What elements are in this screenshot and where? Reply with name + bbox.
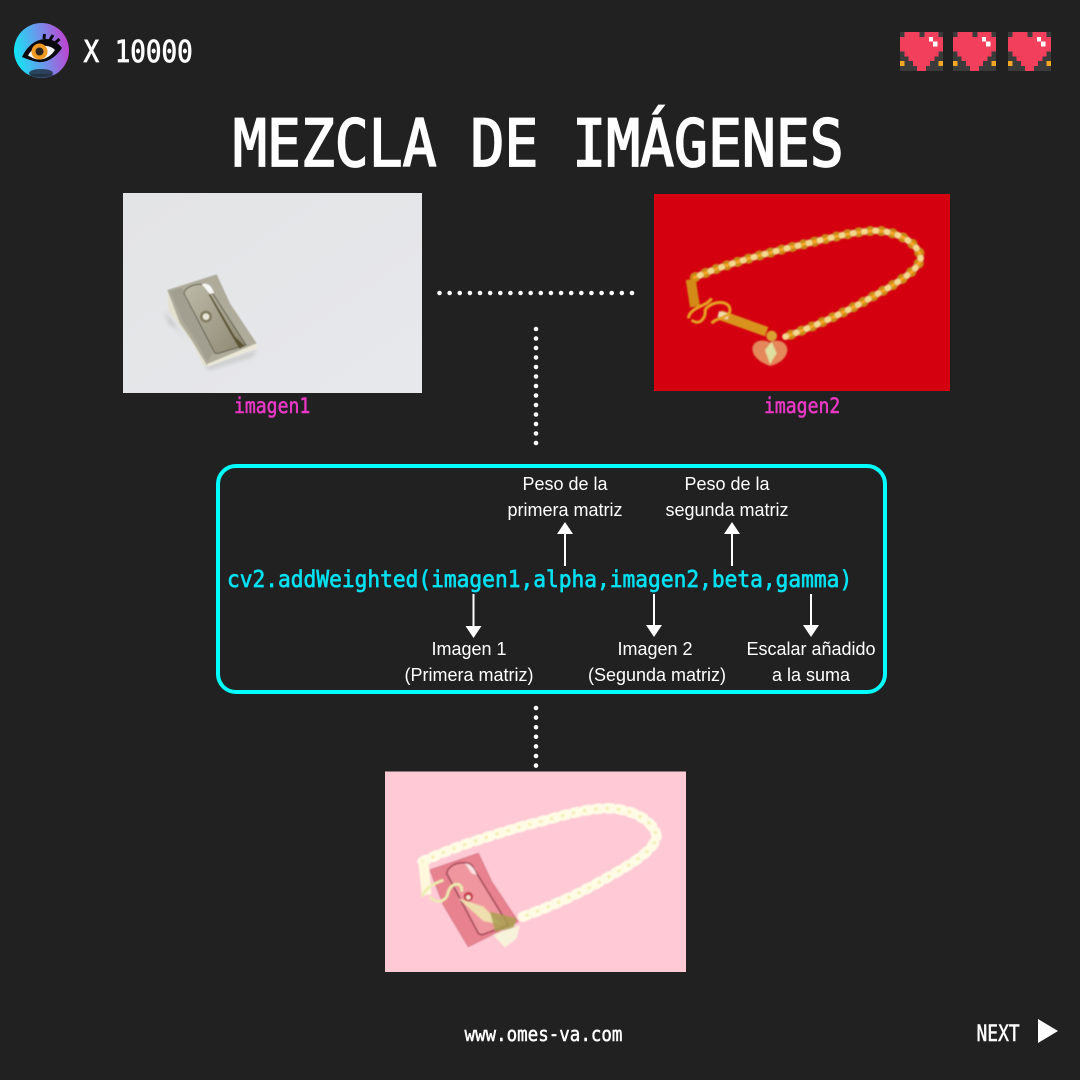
label: escalar: a la suma bbox=[772, 665, 851, 685]
next label: NEXT bbox=[976, 1020, 1020, 1046]
title: MEZCLA DE IMÁGENES bbox=[233, 105, 844, 182]
label: peso primera matriz: Peso de la bbox=[522, 474, 609, 494]
arrow: gamma down bbox=[803, 594, 819, 637]
panel border bbox=[218, 466, 885, 692]
dotted connector: horizontal bbox=[440, 291, 632, 295]
label: imagen 1: Imagen 1 bbox=[431, 639, 507, 659]
dotted connector: upper vertical bbox=[534, 329, 538, 444]
dotted connector: lower vertical bbox=[534, 708, 538, 767]
website url: www.omes-va.com bbox=[464, 1024, 622, 1046]
label: escalar: Escalar añadido bbox=[746, 639, 876, 659]
arrow: imagen2 down bbox=[646, 594, 662, 637]
label: peso primera matriz: primera matriz bbox=[507, 500, 623, 520]
label: peso segunda matriz: Peso de la bbox=[684, 474, 771, 494]
label: imagen 2: Imagen 2 bbox=[617, 639, 693, 659]
hearts bbox=[900, 32, 1051, 71]
photo: blended result bbox=[385, 772, 686, 972]
label: imagen 1: (Primera matriz) bbox=[404, 665, 534, 685]
label: peso segunda matriz: segunda matriz bbox=[665, 500, 789, 520]
label: imagen1: imagen1 bbox=[234, 394, 310, 418]
photo: imagen1 sharpener bbox=[123, 193, 422, 393]
code panel bbox=[218, 466, 885, 692]
arrow: imagen1 down bbox=[466, 594, 482, 638]
photo: imagen2 bracelet bbox=[654, 194, 950, 391]
counter text: X 10000 bbox=[84, 34, 193, 69]
label: imagen 2: (Segunda matriz) bbox=[588, 665, 726, 685]
icon: eye logo bbox=[14, 23, 69, 80]
label: imagen2: imagen2 bbox=[764, 394, 840, 418]
arrow: beta up bbox=[724, 522, 740, 566]
arrow: alpha up bbox=[557, 522, 573, 566]
code line: cv2.addWeighted(imagen1,alpha,imagen2,beta,gamma) bbox=[227, 566, 852, 593]
icon: next arrow bbox=[1038, 1019, 1058, 1043]
